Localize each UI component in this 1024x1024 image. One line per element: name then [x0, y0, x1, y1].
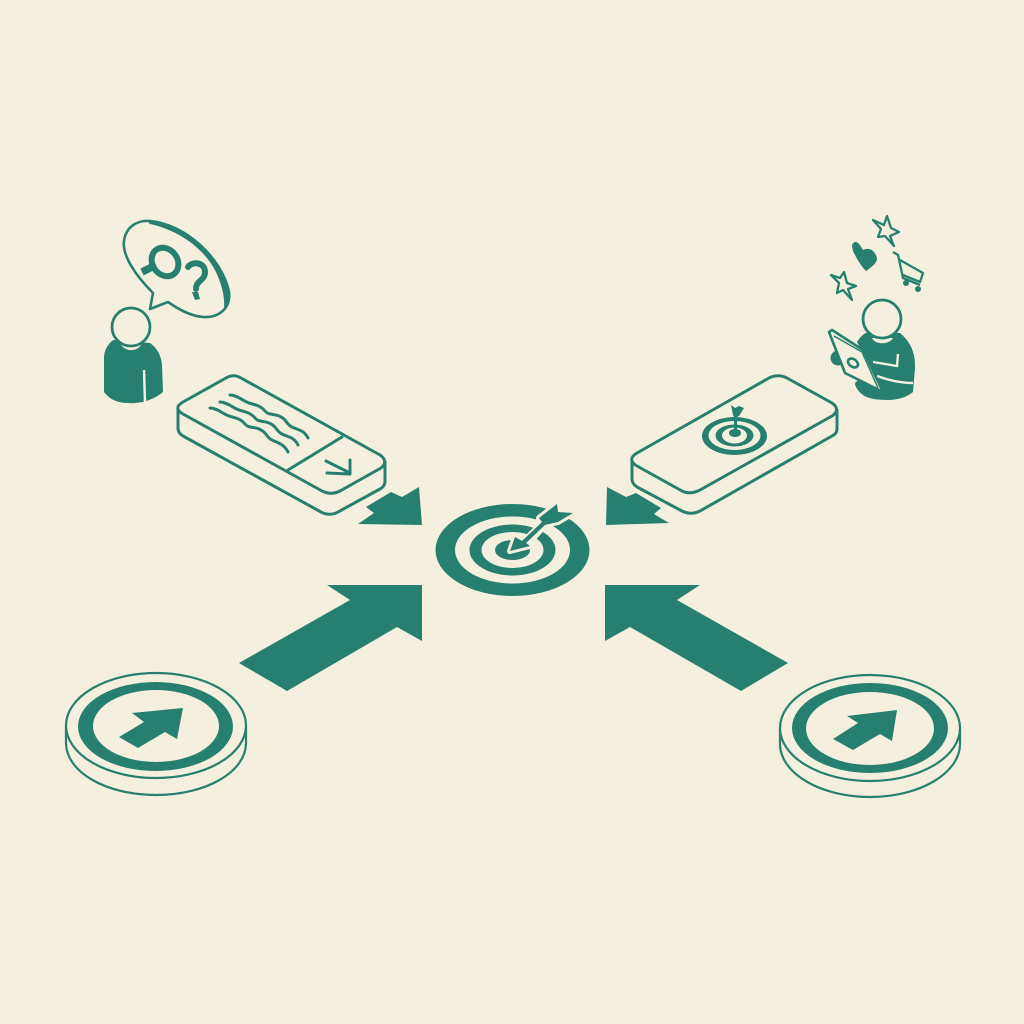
icon: question mark: [188, 263, 205, 300]
person: left figure: [104, 308, 163, 403]
central target with dart: [436, 504, 590, 596]
coin button: left: [66, 673, 246, 795]
icon: magnifier: [142, 243, 184, 281]
icon: dart: [510, 504, 573, 551]
arrow: small upper right: [606, 487, 669, 525]
arrow: small upper left: [358, 487, 422, 525]
icon: star lower: [831, 272, 856, 300]
icon: star upper: [873, 216, 899, 246]
icon: arrow on left coin: [119, 708, 183, 748]
person: right figure with tablet: [829, 300, 915, 400]
icon: arrow on slab: [326, 460, 350, 474]
arrow: large lower left: [239, 585, 422, 691]
icon: small target with arrow: [702, 405, 767, 455]
icon: heart: [852, 242, 877, 271]
icon: tablet: [829, 330, 883, 392]
panel: right slab with target: [632, 376, 837, 513]
coin button: right: [780, 675, 960, 797]
icon: shopping cart: [893, 252, 923, 292]
icon: arrow on right coin: [833, 710, 897, 750]
arrow: large lower right: [605, 585, 788, 691]
panel: left slab with text lines and arrow: [178, 376, 385, 514]
speech bubble with magnifier and question mark: [124, 220, 229, 317]
wavy text lines: [210, 395, 308, 452]
